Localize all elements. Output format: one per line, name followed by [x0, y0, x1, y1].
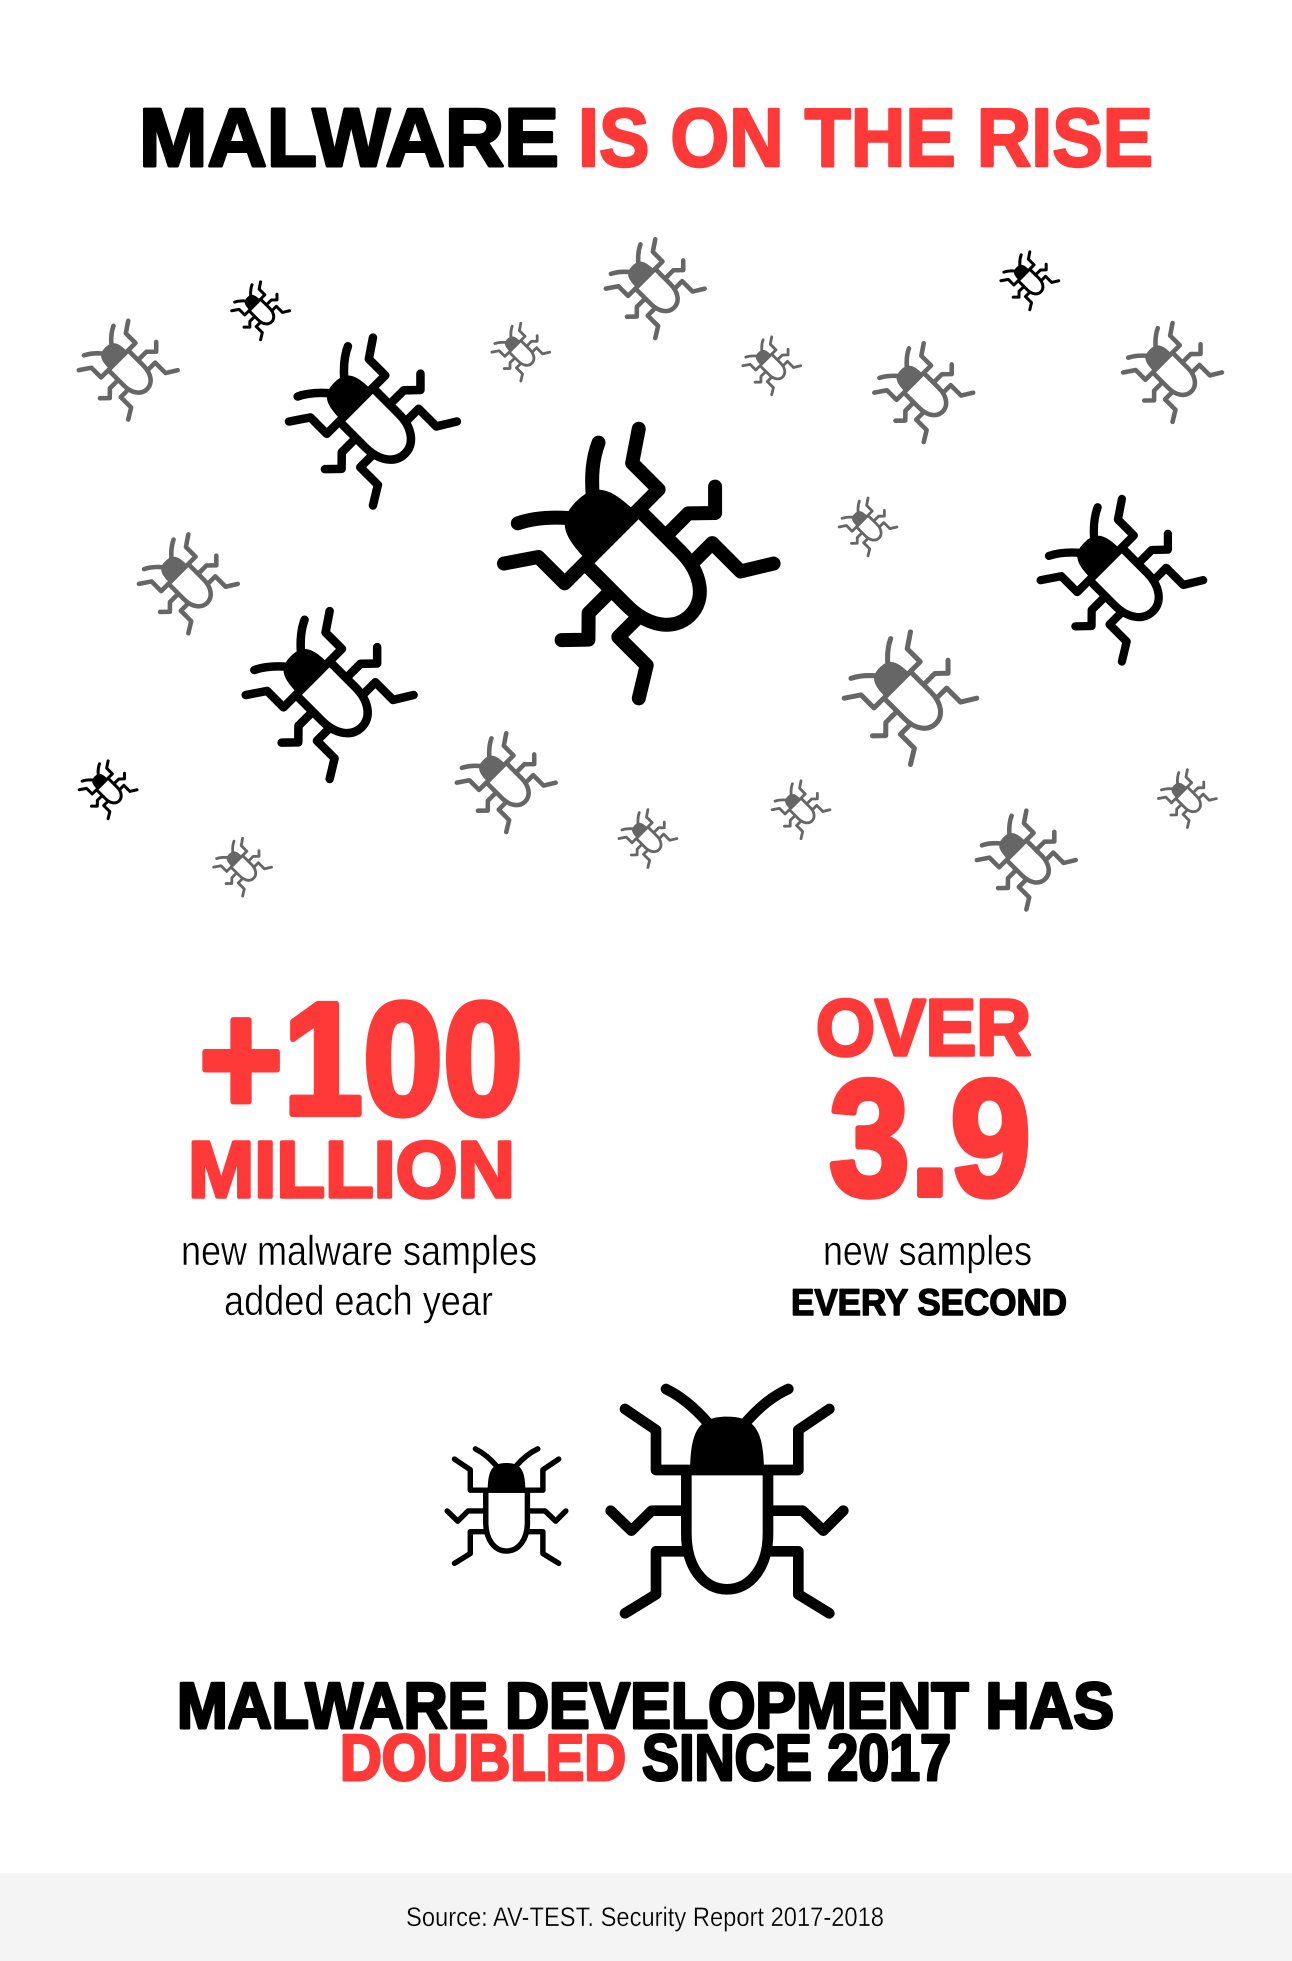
icon: black tiny bug [74, 756, 139, 821]
icon: black medium bug [275, 324, 463, 511]
headline: development doubled: MALWARE DEVELOPMENT HAS [177, 1669, 1114, 1742]
icon: grey tiny bug [1154, 765, 1218, 829]
big number: +100 [199, 969, 523, 1148]
every second label: EVERY SECOND [791, 1282, 1067, 1323]
stat: 3.9 per second [791, 983, 1067, 1323]
icon: grey medium bug [449, 725, 559, 836]
footer source bar [0, 1873, 1292, 1961]
icon: grey medium bug [598, 231, 708, 342]
icon: black tiny bug [996, 247, 1061, 312]
icon: black medium bug [1027, 485, 1209, 667]
icon: grey tiny bug [834, 493, 899, 558]
million label: MILLION [188, 1125, 515, 1214]
headline: development doubled: DOUBLED [340, 1721, 626, 1794]
title: IS ON THE RISE [578, 91, 1153, 184]
title: MALWARE [139, 91, 559, 184]
caption line 1: new malware samples [181, 1227, 537, 1274]
caption: new samples [823, 1227, 1032, 1274]
bugs doubling illustration [447, 1389, 843, 1613]
icon: grey medium bug [131, 526, 241, 637]
over label: OVER [816, 983, 1031, 1072]
big number: 3.9 [829, 1046, 1031, 1230]
stat: 100 million [181, 969, 537, 1324]
icon: grey larger bug [833, 621, 981, 769]
icon: grey tiny bug [767, 776, 832, 841]
icon: large central bug [481, 406, 783, 708]
icon: grey medium bug [71, 313, 181, 423]
icon: black medium bug [232, 597, 419, 785]
icon: grey medium bug [866, 335, 977, 446]
headline: development doubled: SINCE 2017 [642, 1721, 951, 1794]
icon: grey tiny bug [614, 805, 679, 869]
icon: grey tiny bug [738, 332, 803, 397]
icon: grey medium bug [1115, 315, 1225, 425]
headline: development doubled [177, 1669, 1114, 1794]
icon: large bug [611, 1389, 843, 1613]
title [139, 91, 1153, 184]
caption line 2: added each year [224, 1277, 493, 1324]
footer source bar: Source: AV-TEST. Security Report 2017-2018 [406, 1902, 884, 1932]
icon: grey tiny bug [209, 833, 273, 898]
icon: grey tiny bug [487, 318, 552, 383]
icon: grey medium bug [969, 802, 1079, 913]
icon: black tiny bug [227, 277, 291, 342]
bug swarm illustration [71, 231, 1225, 913]
icon: small bug [447, 1449, 566, 1563]
